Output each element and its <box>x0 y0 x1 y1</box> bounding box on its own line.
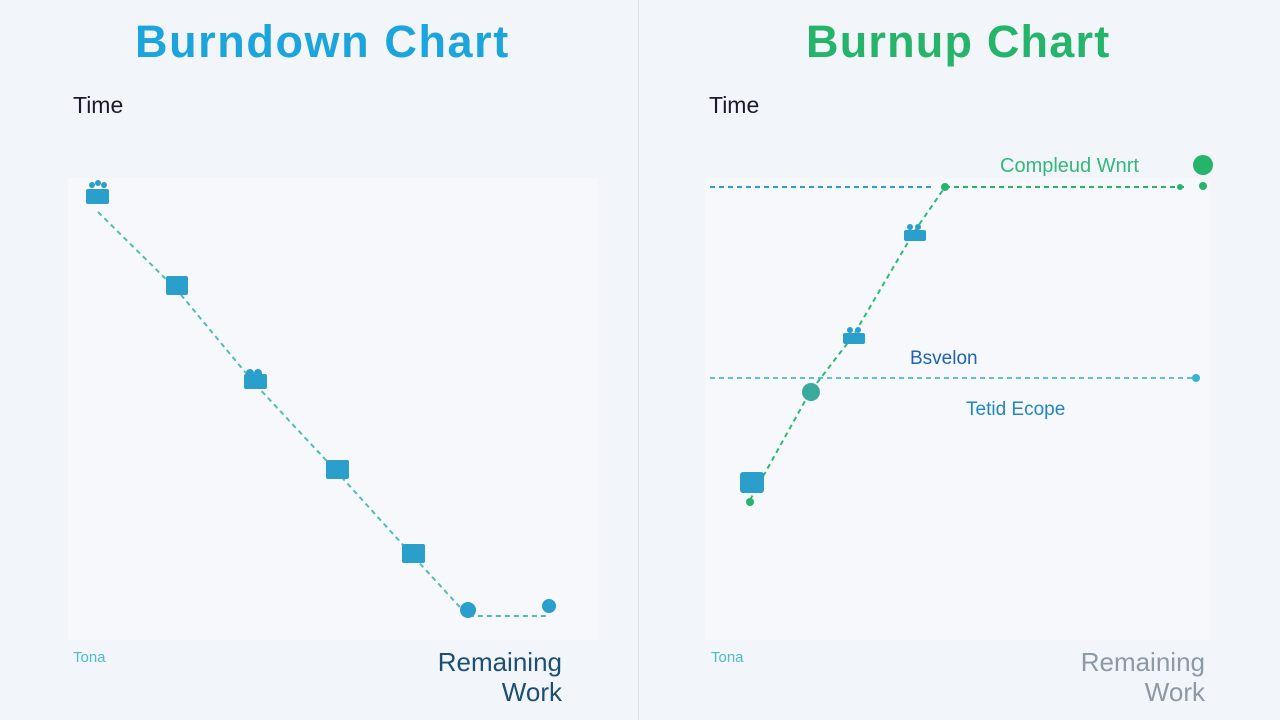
label: time left: Time <box>73 92 123 118</box>
label: total scope: Tetid Ecope <box>966 399 1065 420</box>
title: burnup: Burnup Chart <box>806 16 1110 67</box>
icons: burndown markers <box>86 180 556 618</box>
label: time right: Time <box>709 92 759 118</box>
label: remaining work right: Work <box>1145 677 1205 707</box>
label: remaining work left: Remaining <box>438 647 562 677</box>
completed work line <box>710 186 935 188</box>
title: burndown: Burndown Chart <box>135 16 510 67</box>
label: remaining work left <box>438 647 562 707</box>
label: remaining work right: Remaining <box>1081 647 1205 677</box>
panel: burndown plot area <box>68 178 598 640</box>
divider <box>638 0 639 720</box>
scope line <box>710 377 1198 379</box>
progress line <box>750 187 945 500</box>
panel: burnup plot area <box>705 178 1210 640</box>
label: completed work: Compleud Wnrt <box>1000 155 1139 177</box>
label: baseline: Bsvelon <box>910 348 978 369</box>
label: small time left: Tona <box>73 649 106 666</box>
label: small time right: Tona <box>711 649 744 666</box>
label: remaining work left: Work <box>502 677 562 707</box>
label: remaining work right <box>1081 647 1205 707</box>
